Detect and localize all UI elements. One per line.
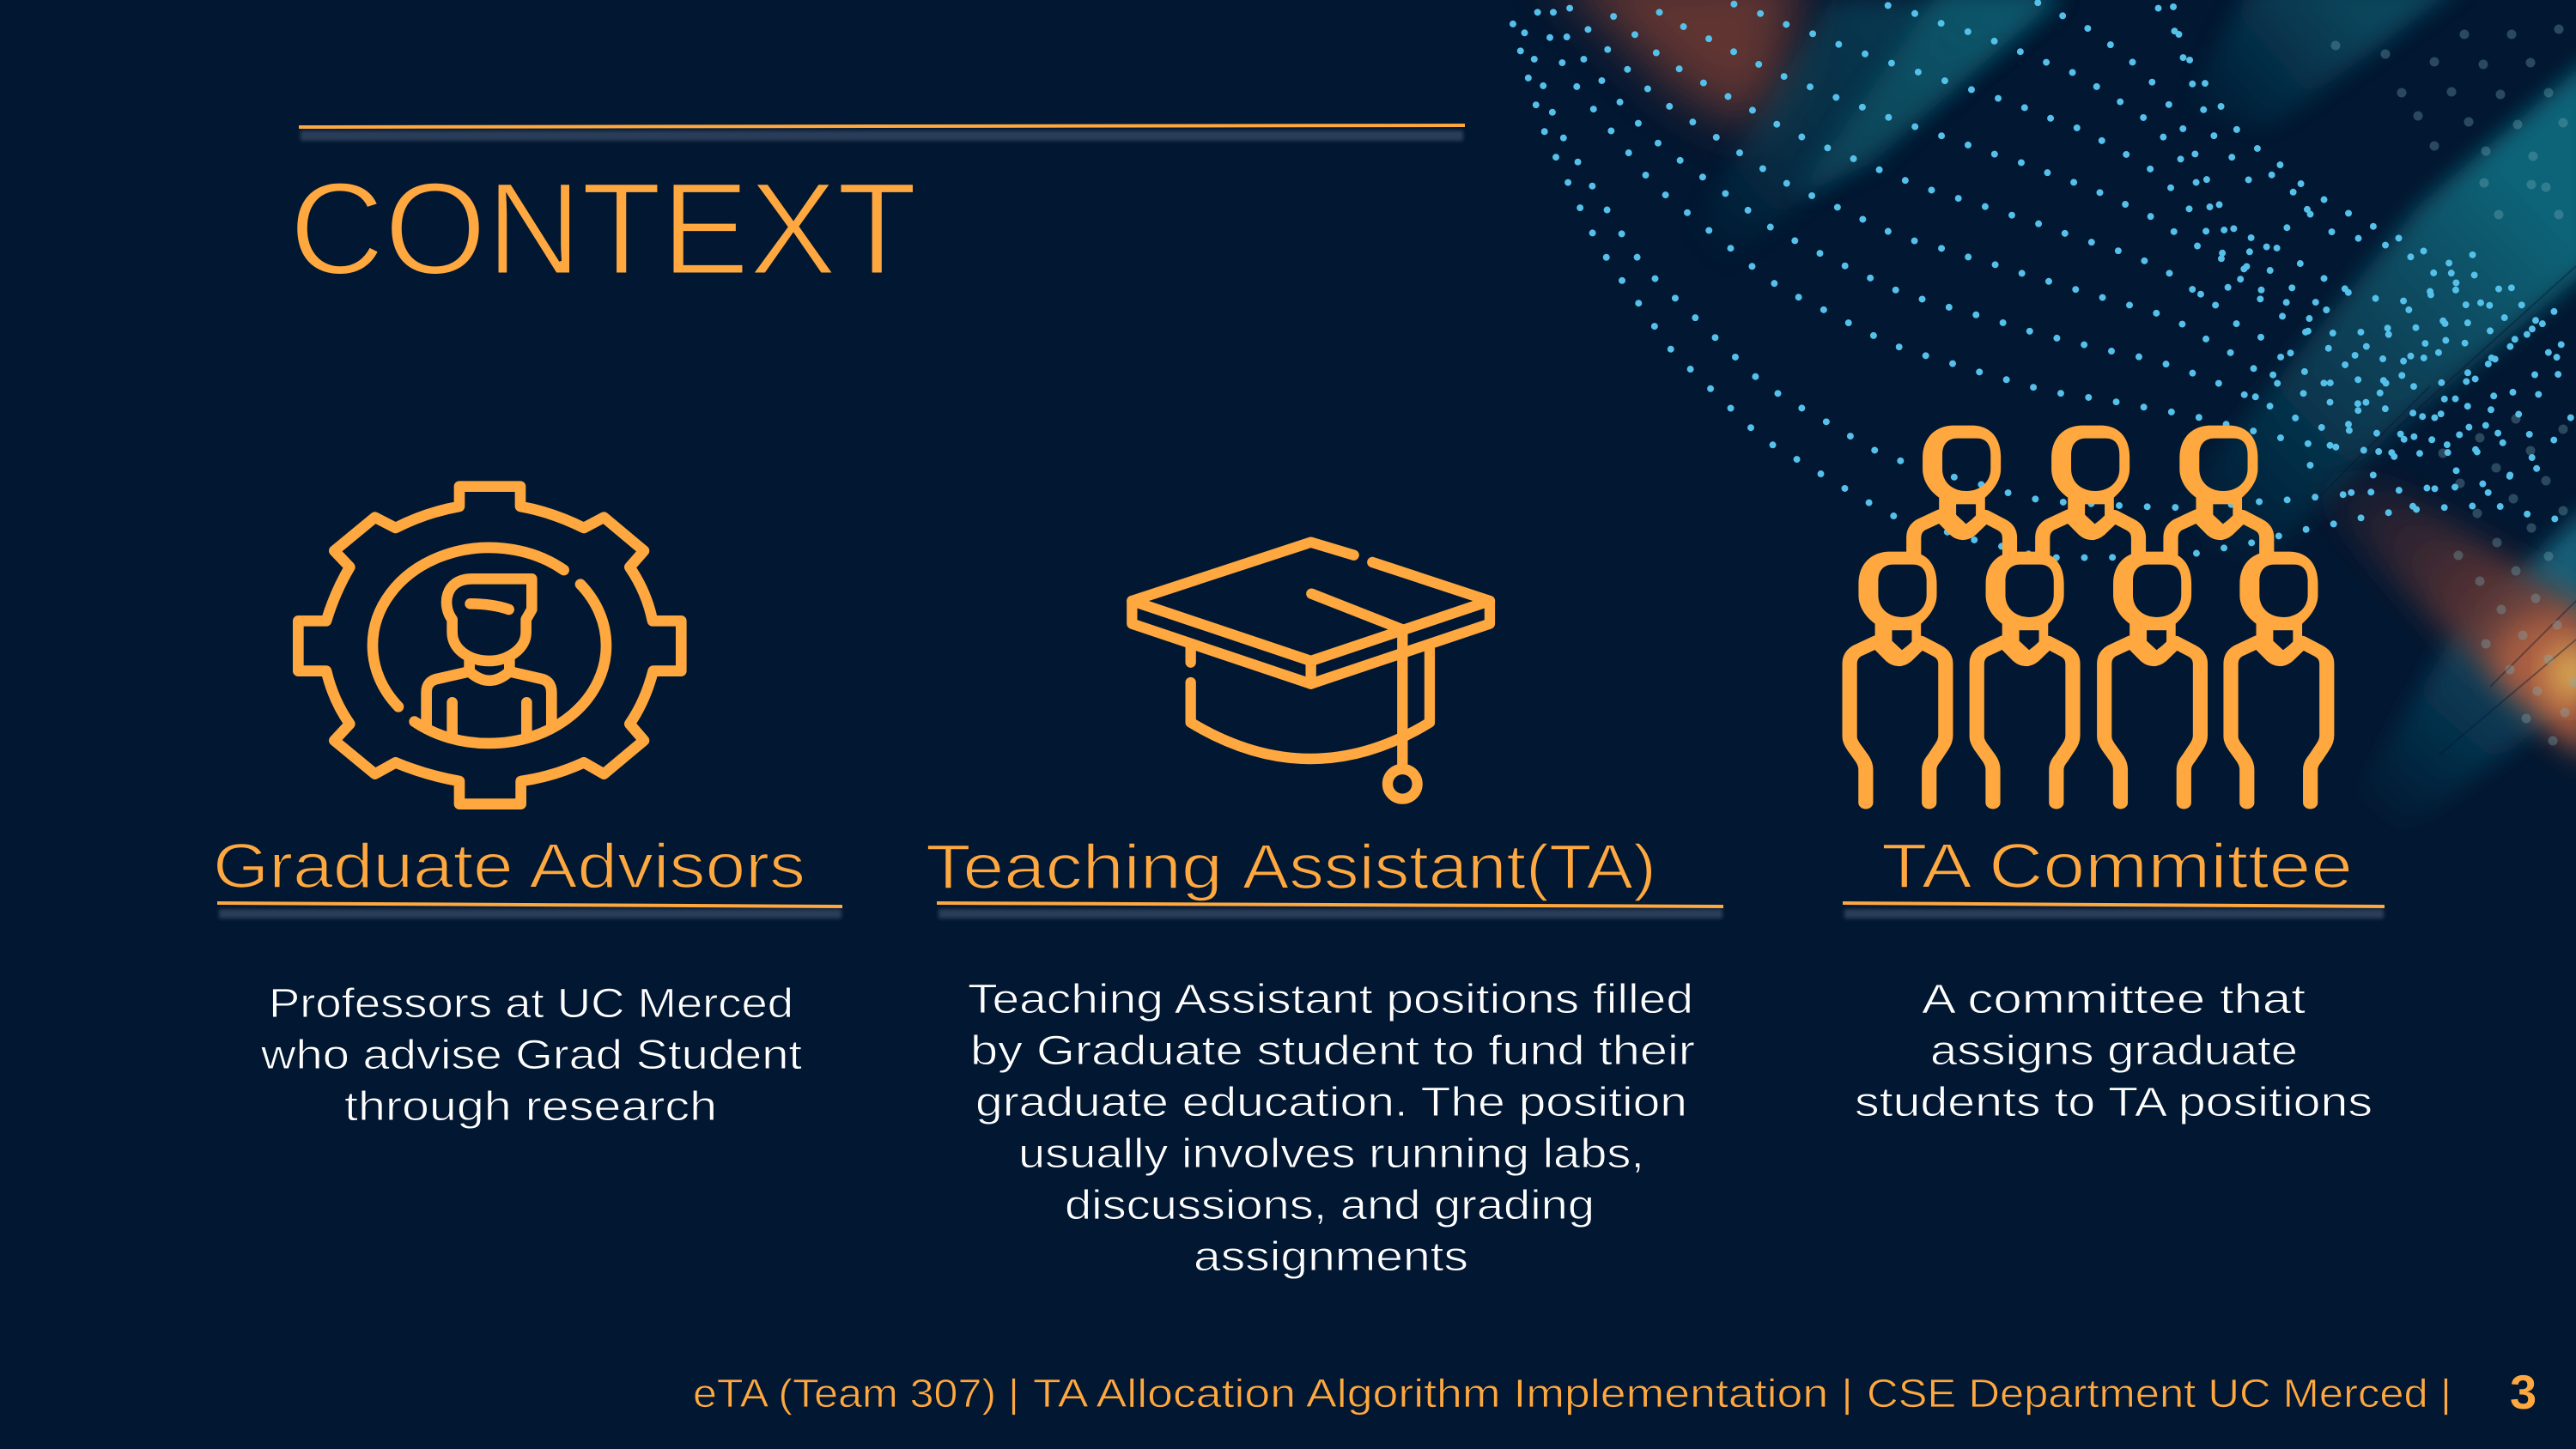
description: by Graduate student to fund their xyxy=(970,1028,1695,1074)
footer text: CSE Department UC Merced | xyxy=(1867,1371,2451,1416)
description: who advise Grad Student xyxy=(260,1033,802,1078)
decorative light streaks xyxy=(1546,0,2576,846)
description: students to TA positions xyxy=(1855,1080,2372,1125)
description: graduate education. The position xyxy=(975,1080,1687,1125)
heading rule xyxy=(937,903,1723,919)
description xyxy=(260,981,802,1130)
icon: graduation cap xyxy=(1132,543,1490,799)
icon: group of people xyxy=(1850,426,2327,803)
description: assignments xyxy=(1194,1234,1468,1280)
description: through research xyxy=(344,1084,717,1130)
description: Professors at UC Merced xyxy=(269,981,793,1027)
icon: gear with person xyxy=(298,487,681,804)
heading: teaching assistant xyxy=(926,833,1656,902)
description: discussions, and grading xyxy=(1065,1183,1595,1228)
heading: graduate advisors: Graduate Advisors xyxy=(213,832,805,901)
description: assigns graduate xyxy=(1930,1028,2298,1074)
description xyxy=(1855,977,2372,1125)
heading: teaching assistant: Teaching xyxy=(926,833,1223,902)
title: CONTEXT xyxy=(289,155,917,302)
footer text: TA Allocation Algorithm Implementation | xyxy=(1033,1371,1853,1416)
heading: teaching assistant: Assistant(TA) xyxy=(1242,833,1656,902)
description: A committee that xyxy=(1922,977,2306,1022)
dot wave pattern xyxy=(1513,3,2576,558)
footer text: eTA (Team 307) | xyxy=(693,1371,1019,1416)
description xyxy=(968,977,1695,1280)
panel: graduate advisors xyxy=(213,487,842,1130)
panel: teaching assistant xyxy=(926,543,1723,1280)
faint background dots xyxy=(2330,24,2576,745)
panel: ta committee xyxy=(1843,426,2385,1125)
footer text xyxy=(693,1371,2451,1416)
description: Teaching Assistant positions filled xyxy=(968,977,1693,1022)
title rule xyxy=(299,125,1465,141)
heading: ta committee: TA Committee xyxy=(1881,832,2353,901)
page number: 3 xyxy=(2510,1365,2537,1419)
heading rule xyxy=(1843,903,2385,919)
description: usually involves running labs, xyxy=(1018,1131,1644,1177)
heading rule xyxy=(217,903,842,919)
